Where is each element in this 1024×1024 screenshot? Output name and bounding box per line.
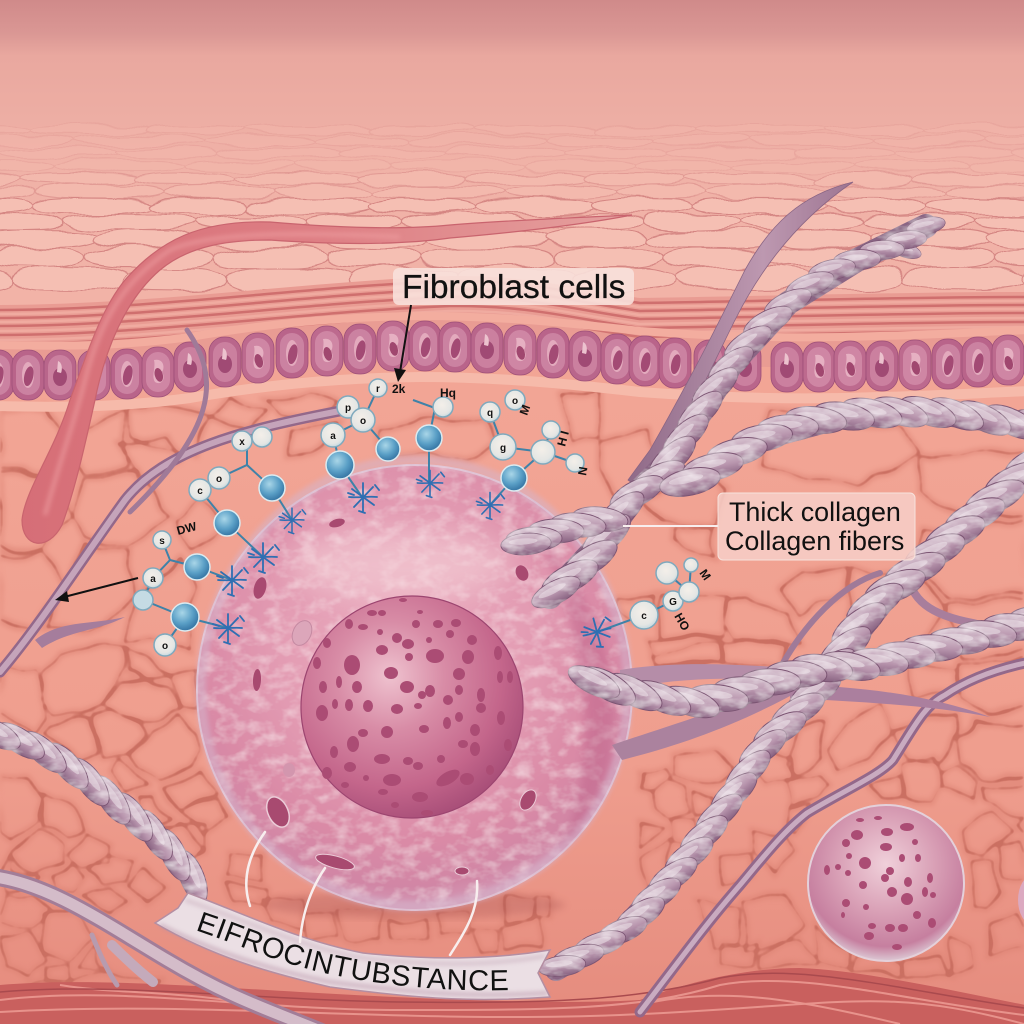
cell highlight	[290, 531, 510, 599]
molecule group: top right: H I	[554, 429, 572, 448]
fiber: lower right	[531, 422, 1024, 992]
thin fibers on right	[612, 182, 1024, 1012]
molecule group: top center	[413, 386, 456, 497]
fiber: short bundle end	[494, 493, 634, 571]
molecule group: top right: q	[487, 408, 493, 419]
molecule group: top right: g	[500, 443, 506, 454]
molecule group: top middle: a	[330, 431, 336, 442]
molecule group: top right	[476, 390, 590, 519]
banner text: EIFROCINTUBSTANCE	[197, 912, 508, 990]
molecule group: top right: o	[512, 396, 518, 407]
white leader lines to banner	[246, 832, 477, 955]
molecule group: left middle	[189, 427, 306, 573]
molecule group: left middle: o	[216, 474, 222, 485]
molecule group: right: c	[641, 611, 647, 622]
molecule group: right: G	[669, 597, 677, 608]
tapered spike fiber	[628, 182, 853, 490]
molecule group: lower left: DW	[175, 519, 199, 538]
nucleus spots	[313, 598, 513, 816]
molecule group: top middle: r	[376, 384, 380, 395]
cell right shading	[540, 540, 614, 850]
cell vacuoles	[251, 517, 540, 875]
molecule group: top right: M	[517, 403, 533, 417]
molecule group: top middle: o	[360, 416, 366, 427]
lower tissue cells	[0, 346, 1024, 1024]
thin fibers behind cell	[0, 330, 345, 672]
molecule group: lower left	[133, 519, 248, 656]
molecule group: left middle: c	[197, 486, 203, 497]
molecule group: top right: N	[575, 466, 590, 477]
banner ribbon	[154, 892, 552, 1000]
fiber: left	[0, 708, 227, 913]
label: collagen fibers: Collagen fibers	[725, 526, 904, 556]
arrow: pointer to fine fiber	[55, 578, 138, 602]
molecule group: lower left: a	[150, 574, 156, 585]
fiber: long upper right	[522, 203, 951, 626]
fiber: mid horizontal	[561, 591, 1024, 727]
arrow: fibroblast label to cell	[394, 305, 411, 382]
elongated hair-like projection	[22, 215, 632, 543]
small cell spots	[824, 816, 936, 950]
edge cell fragment	[1018, 876, 1024, 924]
fiber: lower left tube with branch	[0, 877, 330, 1024]
layered membrane band	[0, 276, 1024, 400]
large cell body	[197, 460, 632, 910]
cast shadow of cell	[265, 891, 565, 919]
muscle layer at bottom	[0, 968, 1024, 1024]
label: collagen fibers	[623, 493, 915, 560]
small secondary cell	[808, 805, 964, 961]
molecule group: top middle: 2k	[392, 382, 406, 396]
molecule group: right	[579, 558, 714, 651]
fiber: upper horizontal	[650, 389, 1024, 518]
molecule group: lower left: o	[162, 641, 168, 652]
pale strips beside epithelium	[0, 316, 1024, 407]
cell rim tint	[201, 460, 628, 906]
molecule group: lower left: s	[159, 536, 165, 547]
label: collagen fibers: Thick collagen	[729, 497, 901, 527]
molecular chains on cell surface	[133, 379, 714, 656]
epithelial cell row	[0, 321, 1024, 400]
molecule group: top middle	[321, 379, 406, 513]
molecule group: right: M	[697, 567, 714, 583]
cell nucleus	[301, 596, 523, 818]
molecule group: top center: Hq	[440, 386, 456, 400]
molecule group: right: HO	[671, 610, 693, 633]
molecule group: top middle: p	[345, 403, 351, 414]
background: upper skin surface	[0, 0, 1024, 330]
label: fibroblast cells: Fibroblast cells	[402, 269, 625, 306]
molecule group: left middle: x	[239, 437, 245, 448]
